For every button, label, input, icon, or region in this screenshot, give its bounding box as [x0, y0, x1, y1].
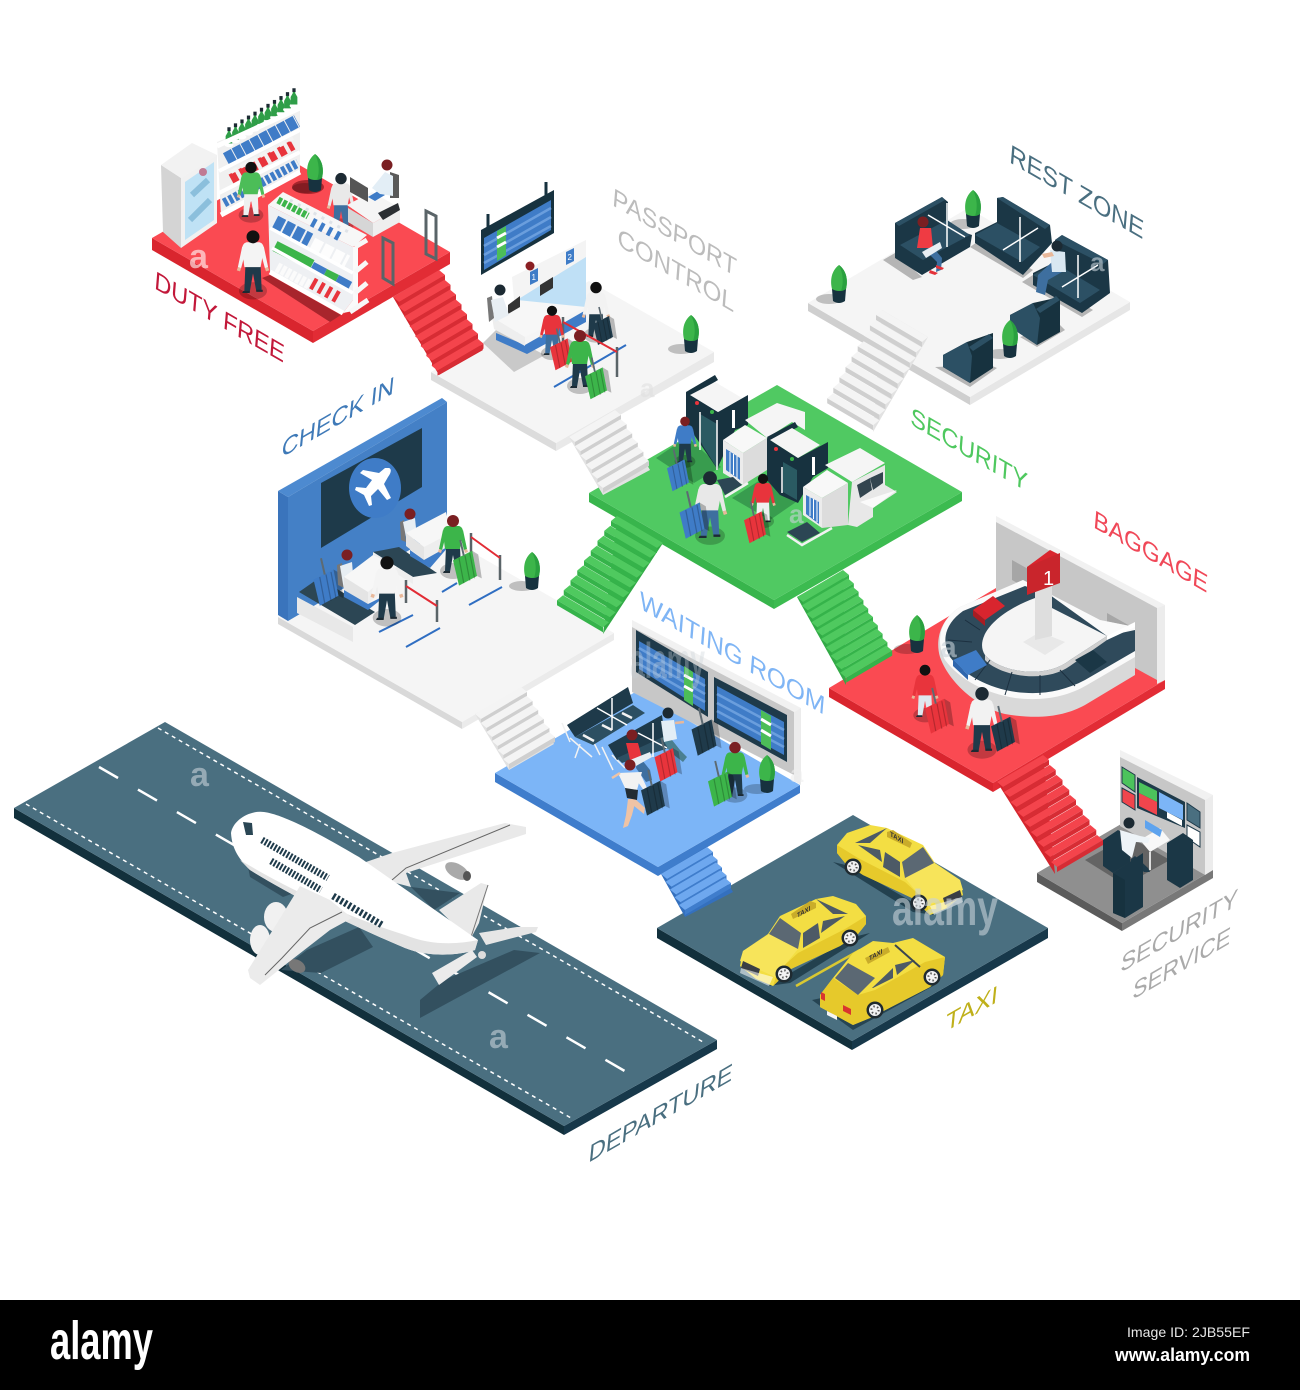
stairs: duty free to passport [393, 270, 484, 376]
suitcase: dark rolling [641, 770, 670, 816]
suitcase: dark [692, 708, 722, 756]
watermark overlays: a [1090, 247, 1105, 277]
blue wall [278, 398, 447, 621]
wall shelves with bottles [217, 88, 300, 215]
carousel [938, 580, 1135, 717]
person: security officer [1120, 818, 1150, 872]
suitcase: green [453, 540, 482, 586]
person: seated woman with laptop [917, 216, 944, 275]
near stabiliser [432, 950, 486, 985]
flight screen left [636, 630, 708, 717]
panel: waiting room [495, 620, 801, 876]
armchair: lower [943, 333, 993, 383]
label: security service [1119, 883, 1239, 1006]
stanchions and rope [406, 533, 500, 622]
watermark overlays: a [789, 499, 804, 529]
suitcase: red [654, 738, 682, 781]
plant: check in [509, 552, 540, 591]
island shelf [268, 192, 368, 313]
plant: rest zone front [987, 320, 1018, 359]
metal detector 1 [686, 375, 748, 470]
person: man in green [721, 742, 749, 803]
check-in agent right [400, 508, 417, 542]
check-in desk right [406, 512, 451, 568]
panel: departure runway [14, 722, 717, 1135]
stanchions [563, 317, 617, 377]
x-ray scanner 1 [717, 403, 805, 497]
wall [1120, 750, 1213, 875]
flight sign post: 1 [1043, 568, 1054, 590]
label: passport control: PASSPORT [612, 183, 738, 282]
flight screen right [714, 677, 787, 762]
plant: waiting room [744, 755, 775, 794]
panel: duty free [152, 88, 450, 343]
label: security service: SERVICE [1131, 922, 1232, 1006]
booth sign 2: 2 [568, 253, 572, 262]
person: woman in red [750, 474, 776, 528]
person: man in green [438, 515, 468, 579]
label: departure: DEPARTURE [587, 1058, 734, 1169]
label: security: SECURITY [910, 402, 1029, 498]
label: waiting room: WAITING ROOM [639, 586, 826, 721]
watermark overlays: a [940, 631, 957, 664]
label: check in: CHECK IN [280, 371, 396, 464]
taxi middle [740, 896, 870, 986]
check-in desk left [344, 555, 397, 610]
person: woman in red [539, 306, 565, 360]
watermark overlays: a [190, 756, 210, 794]
plant: baggage [894, 615, 925, 654]
watermark overlays [189, 238, 1105, 1056]
far stabiliser [479, 927, 538, 945]
seat row back [562, 687, 645, 758]
taxi upper [833, 825, 963, 915]
watermark overlays: a [489, 1018, 509, 1056]
vertical tail [439, 883, 488, 940]
watermark overlays: a [640, 373, 655, 403]
panel: security service [1037, 750, 1213, 931]
footer bar [0, 1300, 1300, 1390]
person: man in blue [673, 417, 697, 468]
cash desk [347, 177, 400, 237]
booth sign 1: 1 [532, 273, 536, 282]
suitcase on belt: dark [1075, 650, 1107, 673]
fuselage [231, 812, 478, 955]
person: green shopper [237, 162, 265, 223]
aircraft shadow [248, 867, 540, 1018]
floor shadow at desk [483, 330, 545, 372]
stairs: passport to security [569, 410, 650, 495]
suitcase on belt: red [973, 596, 1005, 626]
flight sign post [1023, 550, 1065, 655]
suitcase: blue 1 [667, 450, 693, 491]
near wing [248, 886, 352, 985]
panel: passport control [431, 182, 714, 451]
person: customer behind shelf [327, 173, 355, 234]
panel: check in [278, 398, 614, 729]
person: woman running [612, 760, 648, 828]
label: duty free: DUTY FREE [154, 266, 286, 369]
back wall [996, 516, 1165, 684]
monitor wall [1122, 767, 1200, 847]
seat row front [602, 715, 672, 770]
far engine [442, 858, 472, 884]
suitcase: green [708, 761, 737, 807]
parking line [796, 950, 860, 986]
suitcase: dark [991, 706, 1020, 752]
suitcase: red [925, 688, 954, 734]
stairs: rest zone to security [827, 310, 928, 432]
person: man in white with mask [693, 471, 727, 545]
back wall [632, 620, 801, 785]
rack: right [1167, 833, 1193, 888]
stairs: security to check in [557, 516, 663, 634]
fridge [161, 143, 217, 248]
suitcase: green [585, 358, 611, 399]
metal detector 2 [767, 422, 828, 503]
suitcase on belt: blue [953, 650, 987, 680]
sofa: right [1033, 235, 1110, 313]
person: man in white shirt [237, 230, 269, 299]
stairs: baggage to security service [997, 755, 1103, 874]
plant: duty free [292, 154, 323, 193]
footer image id: Image ID: 2JB55EF [1127, 1324, 1250, 1340]
plant: passport [668, 315, 699, 354]
taxi lower: TAXI [869, 948, 882, 963]
plant: rest zone left [816, 265, 847, 304]
check-in agent left [337, 550, 354, 590]
desk with laptop [1140, 820, 1170, 870]
watermark overlays: alamy [630, 633, 705, 689]
airplane [231, 812, 538, 985]
person: man in white at booth [582, 282, 610, 343]
sofa: left [895, 197, 972, 275]
queue line [554, 345, 626, 387]
person: cashier [372, 160, 399, 198]
sofa: centre [975, 197, 1052, 275]
panel: baggage [829, 516, 1165, 792]
taxi upper: TAXI [890, 831, 903, 846]
far wing [363, 823, 526, 887]
label: passport control [612, 183, 738, 319]
suitcase: blue 2 [680, 491, 710, 539]
person: seated man with phone [1036, 240, 1066, 295]
stairs: waiting room to taxi [661, 847, 733, 917]
footer logo: alamy [50, 1311, 153, 1371]
label: rest zone: REST ZONE [1009, 138, 1145, 245]
footer url: www.alamy.com [1114, 1345, 1250, 1365]
person: man in white [370, 556, 404, 627]
runway markings [26, 728, 703, 1118]
panel: rest zone [808, 190, 1130, 405]
wall screen [321, 428, 422, 548]
near engines [250, 902, 308, 976]
plant: rest zone back [950, 190, 981, 229]
person: passport officer [487, 284, 509, 322]
suitcase: red [744, 502, 770, 543]
plane logo [349, 458, 401, 518]
armchair: upper [1010, 296, 1060, 345]
watermark overlays: a [790, 761, 804, 788]
person: seated woman [626, 730, 652, 782]
label: taxi: TAXI [944, 980, 999, 1038]
panel: taxi parking [657, 815, 1048, 1050]
baggage belt [297, 547, 437, 642]
person: seated man [661, 708, 687, 762]
rack: front [1113, 853, 1143, 918]
stairs: check in to waiting room [475, 687, 555, 770]
watermark overlays: a [189, 238, 209, 276]
label: passport control: CONTROL [617, 223, 736, 319]
person: woman in red [912, 665, 938, 722]
suitcase: red [550, 328, 576, 370]
panel: security [589, 375, 962, 609]
taxi lower [812, 938, 945, 1030]
passport desk [492, 240, 586, 354]
suitcase: dark [593, 307, 617, 345]
label: security service: SECURITY [1119, 883, 1239, 979]
security gates [383, 211, 436, 284]
watermark overlays: alamy [892, 880, 998, 936]
floor queue lines [379, 583, 502, 647]
x-ray scanner 2 [787, 448, 897, 545]
person: man in white [965, 687, 999, 759]
stairs: security to baggage [797, 570, 892, 685]
rack: left [1103, 830, 1130, 873]
label: baggage: BAGGAGE [1093, 505, 1209, 599]
flight board [481, 182, 554, 275]
taxi middle: TAXI [797, 905, 810, 920]
person: man in green [565, 330, 595, 394]
suitcase: blue on belt [314, 558, 344, 606]
